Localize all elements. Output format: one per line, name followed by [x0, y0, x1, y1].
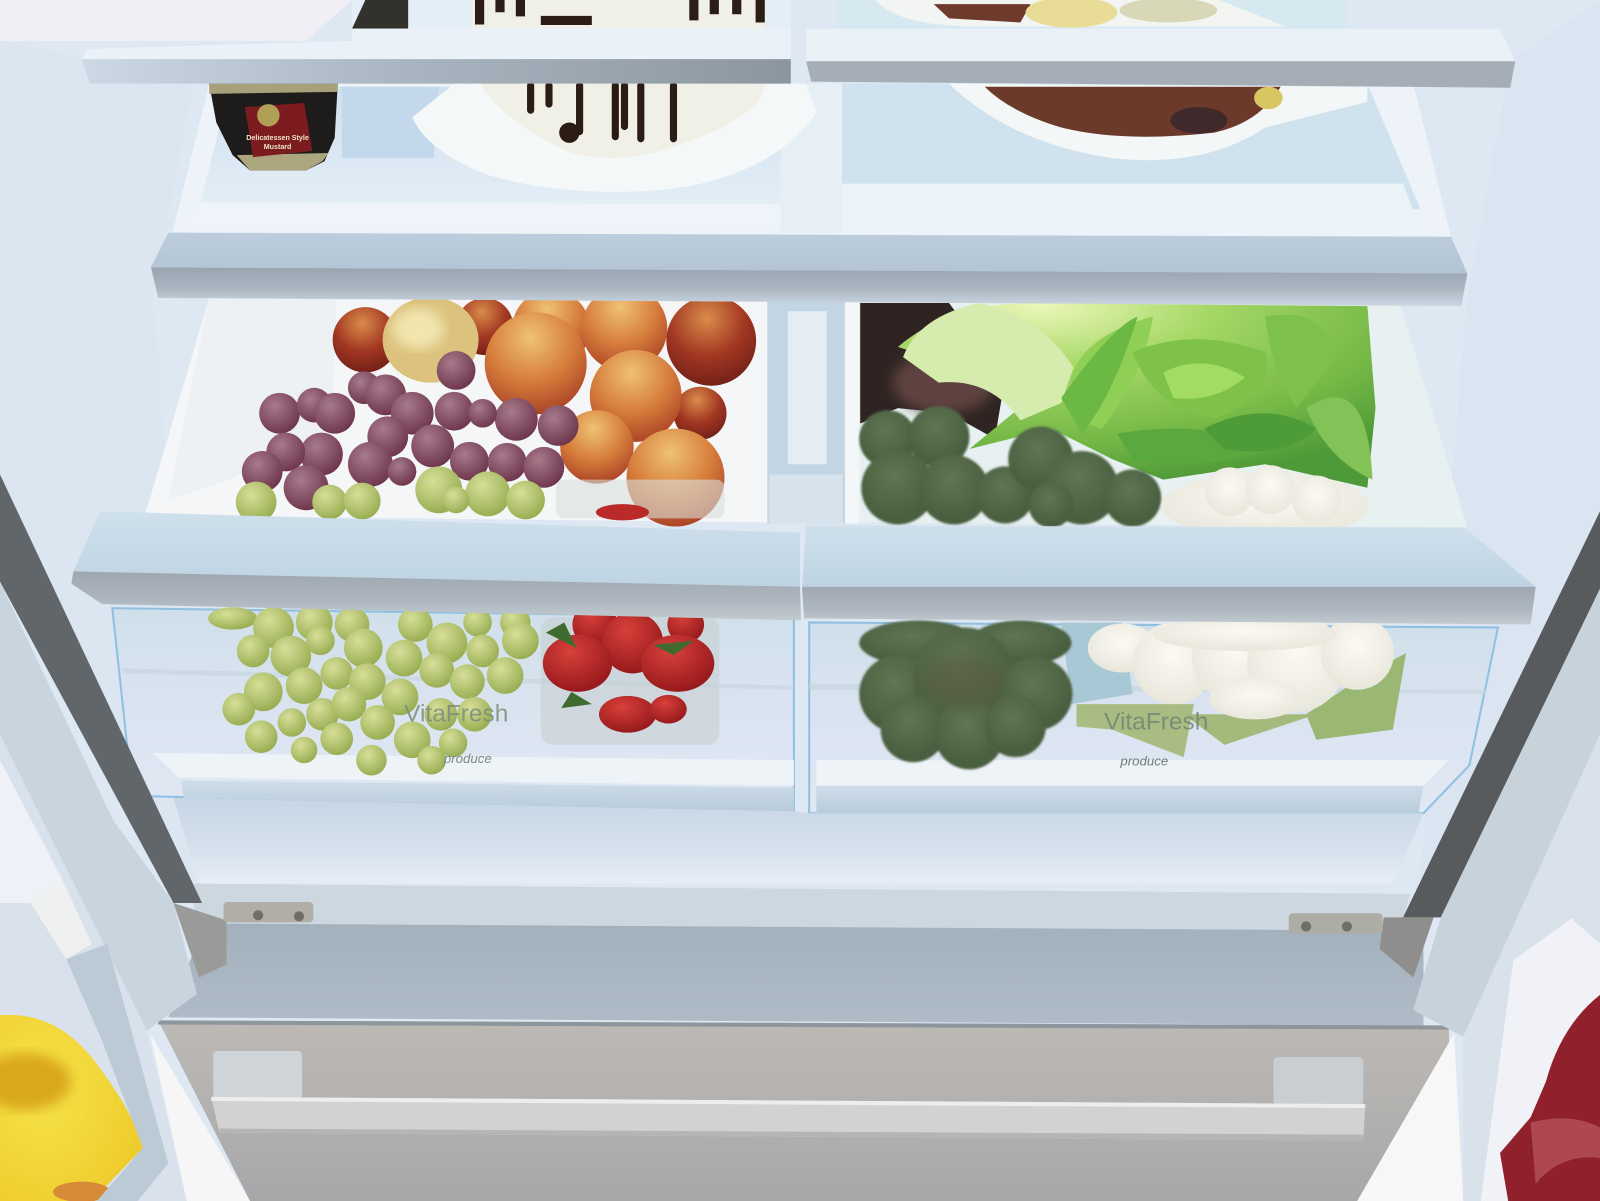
food: mustard jar: Delicatessen Style: [246, 134, 309, 142]
vegetables: broccoli top: [859, 406, 1161, 528]
vegetables: cauliflower top: [1161, 465, 1369, 538]
hinge bracket: right: [1289, 913, 1434, 978]
lower drawer front rail: left: [71, 511, 801, 620]
bin label: right VitaFresh: VitaFresh: [1104, 709, 1208, 736]
top left shelf contents: [0, 0, 791, 41]
floor: right: [1357, 1034, 1463, 1201]
right interior wall: [1418, 0, 1600, 898]
food: fish dish: [949, 84, 1367, 160]
fruit: strawberries in basket: [541, 602, 719, 745]
lower clear bin: right: [809, 622, 1498, 813]
door bin frame: left: [66, 944, 168, 1201]
lower frame strip: [194, 884, 1410, 931]
food: red bottle in door: [1500, 995, 1600, 1201]
bin label: right VitaFresh: [1104, 709, 1208, 768]
right door edge: [1403, 511, 1600, 1201]
fruit: green grapes in bin: [208, 604, 539, 775]
food: mustard jar: [209, 84, 338, 170]
freezer drawer: [158, 1020, 1449, 1201]
fruit: green grapes above rail: [236, 466, 545, 522]
left interior wall: [0, 41, 194, 898]
lower drawer front rail: right: [802, 526, 1536, 624]
vegetables: butter lettuce: [898, 303, 1376, 488]
lower drawer: left compartment: [145, 298, 767, 522]
lower drawer: divider: [767, 301, 847, 523]
top right shelf contents: [837, 0, 1347, 29]
vegetables: cauliflower in bin: [1077, 614, 1406, 757]
top left shelf rail: [82, 29, 791, 84]
upper drawer: glass compartment: [171, 84, 1451, 237]
vegetables: broccoli in bin: [859, 620, 1072, 769]
top right shelf rail: [806, 29, 1515, 88]
freezer drawer handle: [211, 1051, 1365, 1141]
upper drawer front rail: [151, 233, 1467, 306]
food: mustard jar: Mustard: [264, 143, 291, 151]
fruit: red grapes: [242, 351, 579, 510]
bin label: left VitaFresh: VitaFresh: [404, 700, 508, 727]
strawberry basket top: [556, 480, 724, 520]
food: yellow jug in door: [0, 1015, 143, 1201]
lower clear bin: left: [112, 608, 794, 811]
bin label: right VitaFresh: produce: [1119, 753, 1168, 768]
food: cake on plate: [412, 84, 816, 192]
hinge bracket: left: [173, 902, 313, 978]
lower drawer: right compartment: [845, 301, 1467, 528]
vegetables: dark red leaf lettuce: [860, 303, 1005, 439]
silver hinge bar: [168, 923, 1423, 1025]
left door edge: [0, 474, 202, 1201]
bin label: left VitaFresh: [404, 700, 508, 766]
interior floor below bins: [173, 798, 1423, 884]
floor: left: [150, 1034, 250, 1201]
fruit: nectarines: [333, 286, 756, 527]
bin label: left VitaFresh: produce: [443, 751, 492, 766]
